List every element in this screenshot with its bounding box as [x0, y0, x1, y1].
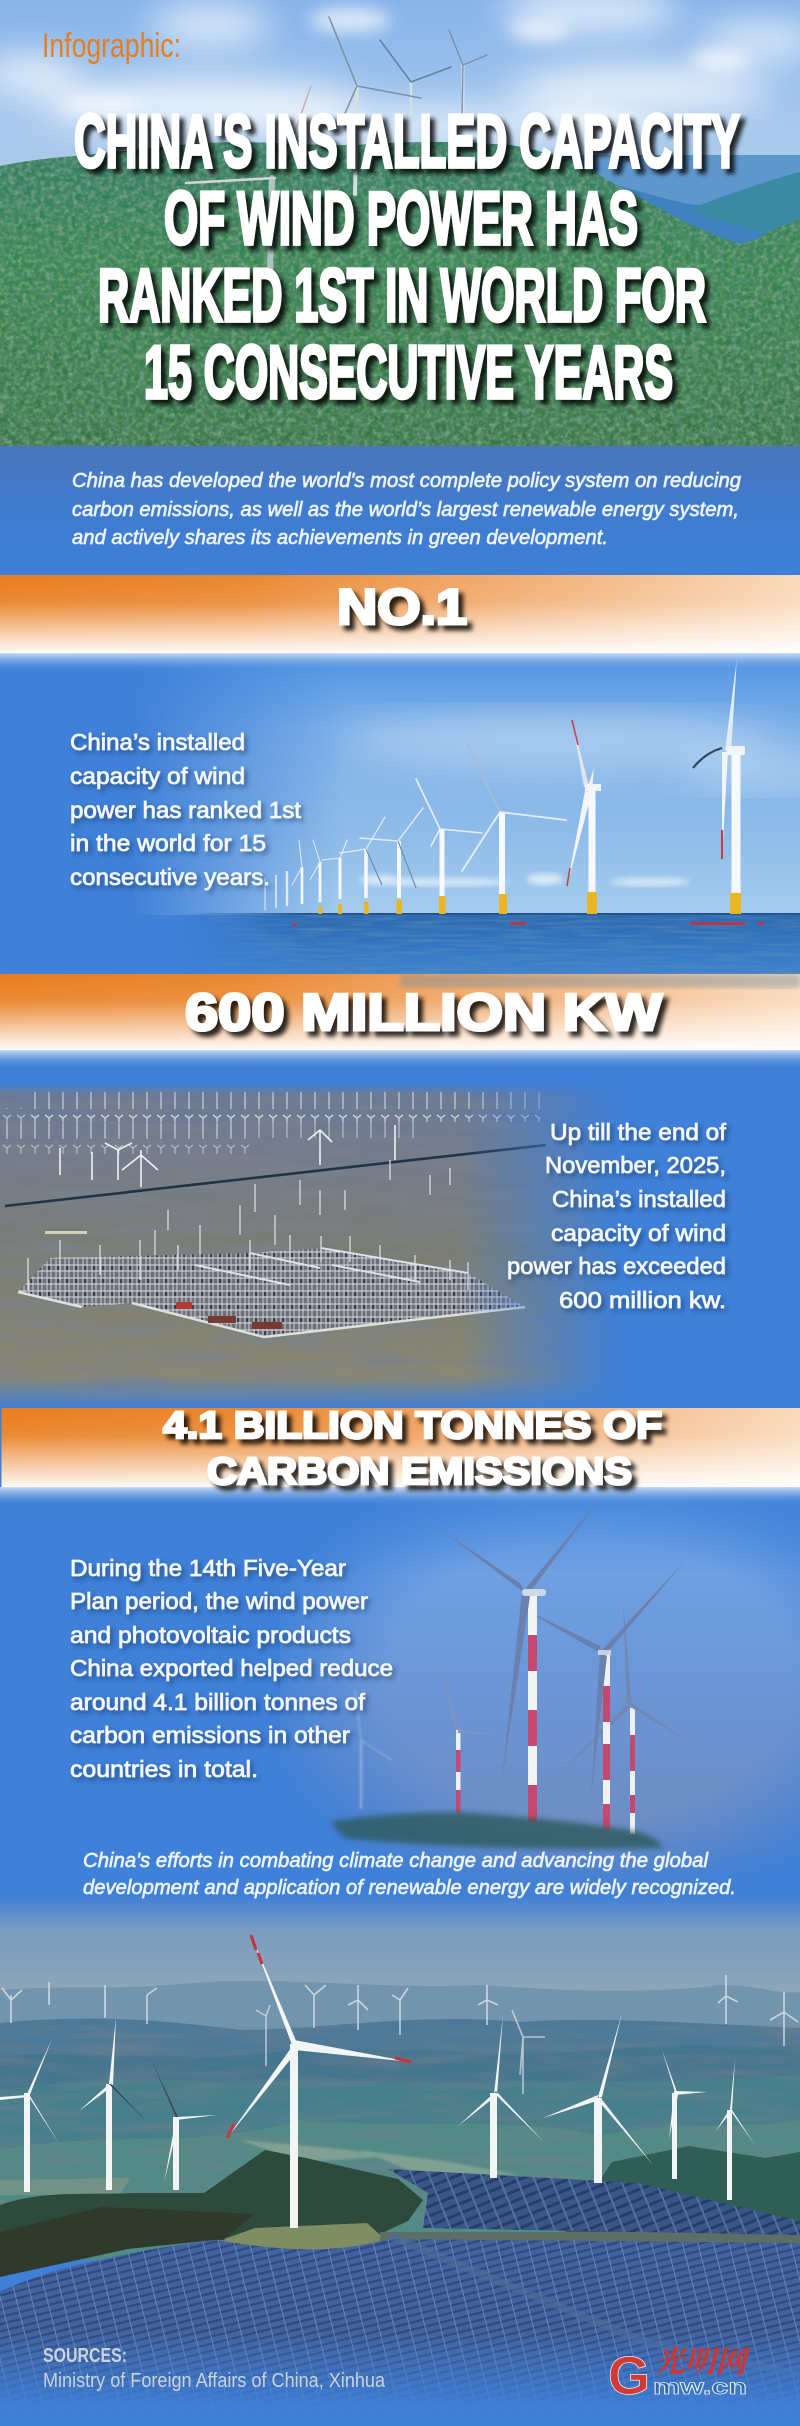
icon: electrical substation [18, 1248, 525, 1337]
panel: section 2 desert wind farm and substation [0, 1072, 620, 1408]
text: section 2 body: November, 2025, [545, 1152, 726, 1178]
icon: turbine B [514, 1560, 686, 1830]
text: closing statement: development and application of renewable energy are widely recognized. [83, 1877, 736, 1899]
logo: gmw.cn: 光明网 [654, 2337, 751, 2381]
text: section 2 body: power has exceeded [507, 1253, 726, 1279]
logo: gmw.cn [608, 2337, 751, 2406]
icon: turbine C [557, 1600, 694, 1834]
heading band: NO.1 [0, 575, 800, 673]
text: section 3 body: around 4.1 billion tonnes of [70, 1689, 365, 1715]
text: section 1 body: consecutive years. [70, 864, 270, 890]
heading band: 4.1 billion tonnes: 4.1 BILLION TONNES OF [163, 1405, 662, 1447]
icon: rows of small turbines [0, 1092, 540, 1154]
text: section 2 body: Up till the end of [550, 1119, 726, 1145]
icon: green hilltop [330, 1812, 664, 1849]
text: section 3 body: During the 14th Five-Year [70, 1555, 346, 1581]
infographic label: Infographic: [42, 27, 181, 65]
panel: section 3 red-white turbines [280, 1490, 800, 1910]
panel: intro text: carbon emissions, as well as the world’s largest renewable energy system, [72, 499, 739, 521]
icon: turbine D [414, 1646, 502, 1813]
heading band: NO.1: NO.1 [337, 579, 467, 635]
icon: closing photo distant turbines [2, 1975, 798, 2094]
text: section 3 body: China exported helped reduce [70, 1655, 393, 1681]
panel: intro text: China has developed the world's most complete policy system on reducing [72, 470, 741, 492]
text: section 2 body: 600 million kw. [559, 1287, 726, 1313]
sources: SOURCES: [43, 2345, 127, 2367]
logo: gmw.cn: G [608, 2346, 650, 2406]
icon: hero wind turbines [186, 17, 487, 274]
text: section 2 body [507, 1119, 726, 1313]
panel: hero photo with wind turbines on green mountain [0, 0, 800, 446]
icon: offshore turbines row [265, 657, 764, 926]
sources [43, 2345, 386, 2392]
text: section 3 body: carbon emissions in other [70, 1722, 350, 1748]
text: closing statement: China's efforts in combating climate change and advancing the global [83, 1850, 709, 1872]
text: section 1 body: China’s installed [70, 729, 245, 755]
heading band: 600 MILLION KW: 600 MILLION KW [185, 984, 663, 1042]
text: section 3 body: Plan period, the wind power [70, 1588, 368, 1614]
icon: closing photo turbines [0, 1935, 755, 2228]
text: section 3 body: and photovoltaic products [70, 1622, 351, 1648]
icon: pylons [155, 1160, 450, 1255]
text: section 1 body: capacity of wind [70, 763, 245, 789]
text: closing statement [83, 1850, 736, 1899]
panel: closing photo with turbines and solar panels [0, 1895, 800, 2426]
text: section 3 body [70, 1555, 393, 1782]
heading band: 4.1 billion tonnes: CARBON EMISSIONS [207, 1451, 632, 1493]
title [74, 99, 740, 414]
text: section 1 body: power has ranked 1st [70, 797, 301, 823]
text: section 1 body [70, 729, 301, 890]
logo: gmw.cn: mw.cn [653, 2376, 747, 2399]
text: section 2 body: capacity of wind [551, 1220, 726, 1246]
text: section 1 body: in the world for 15 [70, 830, 266, 856]
panel: intro text: and actively shares its achievements in green development. [72, 527, 608, 549]
panel: section 1 offshore wind [130, 653, 800, 974]
text: section 3 body: countries in total. [70, 1756, 258, 1782]
panel: intro text [0, 446, 800, 575]
icon: turbine A [436, 1499, 600, 1822]
heading band: 600 MILLION KW [0, 974, 800, 1070]
sources: Ministry of Foreign Affairs of China, Xinhua [43, 2370, 386, 2392]
heading band: 4.1 billion tonnes [0, 1405, 800, 1507]
text: section 2 body: China’s installed [552, 1186, 726, 1212]
icon: foreground turbine [227, 1935, 411, 2228]
